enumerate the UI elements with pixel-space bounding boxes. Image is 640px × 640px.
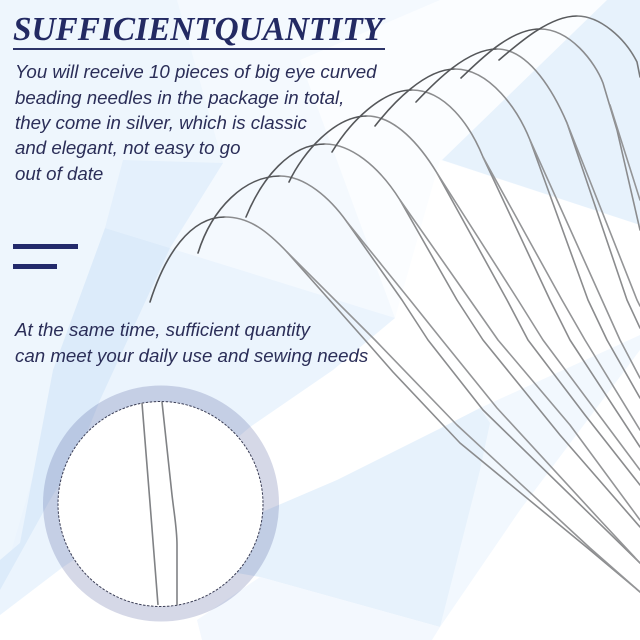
text block: package description (15, 61, 377, 184)
circle ring (43, 386, 279, 622)
text block: package description: You will receive 10 pieces of big eye curved (15, 61, 377, 82)
needle 9 (499, 16, 640, 77)
decorative accent bars (13, 244, 78, 269)
close-up needle wires (142, 402, 177, 605)
text block: package description: beading needles in the package in total, (15, 87, 344, 108)
title underline (13, 48, 385, 50)
needle 7 (416, 49, 640, 328)
needle 8 (461, 29, 640, 230)
needle 5 (332, 90, 640, 447)
title: SUFFICIENTQUANTITY (13, 11, 386, 48)
text block: package description: they come in silver, which is classic (15, 112, 307, 133)
circle interior with dashed border (58, 402, 263, 606)
needle 4 (289, 116, 640, 485)
text block: daily use (14, 319, 368, 366)
needle 3 (246, 144, 640, 527)
detail circle: needle close-up (43, 386, 279, 622)
needle 6 (375, 69, 640, 398)
text block: package description: and elegant, not easy to go (15, 137, 240, 158)
text block: package description: out of date (15, 163, 103, 184)
needles: nine curved big eye beading needles (150, 16, 640, 592)
text block: daily use: At the same time, sufficient quantity (14, 319, 312, 340)
needle 1 (150, 217, 640, 592)
needle 2 (198, 176, 640, 563)
text block: daily use: can meet your daily use and sewing needs (15, 345, 368, 366)
